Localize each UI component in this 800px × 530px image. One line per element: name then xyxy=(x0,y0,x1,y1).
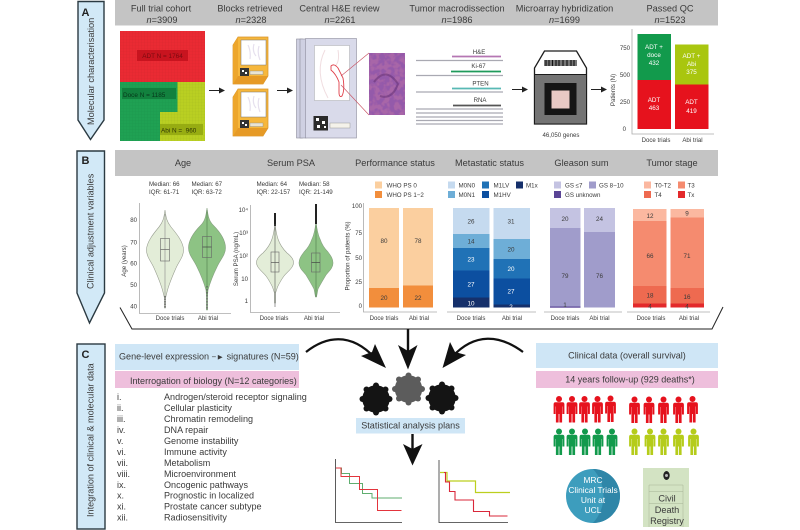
chart: performance status: Doce trials xyxy=(370,315,398,322)
chart: Gleason sum xyxy=(544,182,624,322)
chart: tumor stage xyxy=(627,182,710,322)
chart: PSA violins: 10⁴ xyxy=(239,207,248,214)
chart: tumor stage: 16 xyxy=(683,294,691,301)
header band B: Tumor stage xyxy=(646,158,698,168)
chart: metastatic status: 27 xyxy=(467,282,475,288)
arrow xyxy=(512,86,528,92)
arrow centre xyxy=(398,329,418,370)
chart: tumor stage: Doce trials xyxy=(637,315,665,322)
chart: PSA violins: Median: 64 xyxy=(256,181,288,188)
stacked bar: passed QC: Patients (N) xyxy=(610,74,617,106)
header band A: n=1699 xyxy=(549,15,580,25)
chart: metastatic status: M1x xyxy=(526,182,539,190)
section arrow B: Clinical adjustment variables xyxy=(86,173,96,289)
chart: metastatic status: 2 xyxy=(509,304,513,311)
section box C: Integration of clinical & molecular data xyxy=(86,362,96,517)
chart: tumor stage: 4 xyxy=(685,304,689,310)
chart: PSA violins: Serum PSA (ng/mL) xyxy=(233,232,240,286)
tumor macrodissection slides: Ki-67 xyxy=(471,63,486,70)
chart: performance status: 78 xyxy=(414,238,422,245)
stacked bar: passed QC: ADT xyxy=(685,99,698,106)
section box C xyxy=(77,344,105,529)
list: categories: Androgen/steroid receptor signaling xyxy=(164,392,307,402)
header band B: Performance status xyxy=(355,158,435,168)
chart: PSA violins: Abi trial xyxy=(304,315,324,322)
box: clinical data xyxy=(536,343,718,368)
chart: Gleason sum: 24 xyxy=(596,216,603,223)
section box C: C xyxy=(82,349,90,361)
list: categories: vi. xyxy=(117,447,126,457)
chart: age violins: Age (years) xyxy=(121,245,128,277)
icons: people xyxy=(554,396,699,455)
chart: age violins: Doce trials xyxy=(156,315,184,322)
chart: performance status: Abi trial xyxy=(409,315,429,322)
arrow xyxy=(591,86,607,92)
chart: PSA violins: 1 xyxy=(245,298,249,305)
bracket xyxy=(120,307,723,329)
header band A: Passed QC xyxy=(647,4,694,14)
stacked bar: passed QC: 0 xyxy=(623,126,627,133)
header band A: n=3909 xyxy=(147,15,177,25)
list: categories: xi. xyxy=(117,502,126,512)
chart: tumor stage: 18 xyxy=(646,292,654,300)
chart: tumor stage: 4 xyxy=(648,304,652,310)
box: gene-level expression xyxy=(115,344,299,370)
chart: performance status: 20 xyxy=(380,295,388,302)
chart: metastatic status xyxy=(447,182,539,322)
chart: performance status xyxy=(344,182,437,322)
stacked bar: passed QC xyxy=(610,29,714,144)
header band A: Central H&E review xyxy=(299,4,380,14)
arrow down xyxy=(403,434,422,466)
chart: age violins: 70 xyxy=(130,240,138,246)
icon: civil death registry: Death xyxy=(655,505,679,515)
chart: age violins: Median: 67 xyxy=(192,181,223,188)
stacked bar: passed QC: Doce trials xyxy=(642,137,670,144)
chart: tumor stage: Abi trial xyxy=(679,315,699,322)
stacked bar: passed QC: ADT xyxy=(648,97,660,104)
stacked bar: passed QC: 500 xyxy=(620,72,631,79)
box: statistical analysis plans xyxy=(356,418,465,434)
list: categories: ii. xyxy=(117,403,124,413)
chart: metastatic status: Doce trials xyxy=(457,315,485,322)
chart: age violins: Median: 66 xyxy=(149,181,180,188)
icon: MRC circle: Unit at xyxy=(581,495,606,505)
list: categories: iv. xyxy=(117,425,125,435)
header band B: Metastatic status xyxy=(455,158,524,168)
stacked bar: passed QC: 250 xyxy=(620,99,631,106)
list: categories: Radiosensitivity xyxy=(164,512,227,522)
section arrow A: A xyxy=(82,7,90,19)
list: categories: DNA repair xyxy=(164,425,208,435)
waffle: full trial cohort: ADT N = 1764 xyxy=(142,53,183,60)
chart: age violins: Abi trial xyxy=(198,315,218,322)
chart: age violins: IQR: 61-71 xyxy=(149,189,180,196)
panel A: molecular characterisation xyxy=(78,0,718,144)
chart: Gleason sum: GS unknown xyxy=(565,192,601,199)
section arrow A: Molecular characterisation xyxy=(86,18,96,125)
chart: metastatic status: 20 xyxy=(507,246,515,254)
chart: tumor stage: 66 xyxy=(646,253,654,260)
section arrow B xyxy=(77,151,104,323)
tumor macrodissection slides: PTEN xyxy=(472,80,489,88)
chart: tumor stage: T3 xyxy=(688,182,695,190)
chart: performance status: Proportion of patients (%) xyxy=(344,221,352,291)
chart: performance status: WHO PS 0 xyxy=(386,182,417,190)
chart: metastatic status: 26 xyxy=(467,218,475,226)
icon: civil death registry xyxy=(643,468,689,527)
chart: age violins: 50 xyxy=(130,282,138,289)
header band A: Tumor macrodissection xyxy=(409,4,505,14)
icon: MRC circle xyxy=(566,469,620,523)
chart: age violins: 80 xyxy=(130,217,138,224)
icon: tissue blocks xyxy=(233,37,268,136)
stacked bar: passed QC: 750 xyxy=(620,45,631,52)
chart: Gleason sum: 79 xyxy=(561,273,569,280)
stacked bar: passed QC: Abi xyxy=(687,61,696,68)
chart: metastatic status: M0N0 xyxy=(458,182,476,190)
icon: MRC circle: Clinical Trials xyxy=(568,485,618,495)
chart: metastatic status: Abi trial xyxy=(502,315,522,322)
chart: performance status: 75 xyxy=(355,230,363,237)
chart: Gleason sum: Abi trial xyxy=(589,315,610,322)
arrow xyxy=(209,88,225,94)
chart: age violins: 40 xyxy=(130,304,138,310)
header band A: n=2261 xyxy=(325,15,355,25)
list: categories: Metabolism xyxy=(164,458,210,468)
stacked bar: passed QC: ADT + xyxy=(645,44,663,51)
icon: MRC circle: UCL xyxy=(585,505,602,515)
stacked bar: passed QC: 463 xyxy=(649,105,660,112)
chart: tumor stage: T4 xyxy=(654,192,662,199)
chart: PSA violins: IQR: 21-149 xyxy=(299,189,333,196)
chart: PSA violins xyxy=(233,181,340,322)
panel B: clinical adjustment variables xyxy=(77,150,723,329)
chart: Gleason sum: Doce trials xyxy=(551,315,579,322)
chart: Gleason sum: 76 xyxy=(596,273,603,280)
icon: civil death registry: Civil xyxy=(658,494,676,504)
box: statistical analysis plans: Statistical analysis plans xyxy=(361,421,460,431)
icon: microarray chip xyxy=(534,51,586,124)
header band B: Age xyxy=(175,158,191,168)
list: categories: viii. xyxy=(117,469,130,479)
list: categories: Genome instability xyxy=(164,436,239,446)
header band B: Serum PSA xyxy=(267,158,316,168)
chart: performance status: 100 xyxy=(352,203,363,210)
chart: Gleason sum: 1 xyxy=(563,302,567,309)
panel C: integration xyxy=(77,329,718,529)
header band A: n=2328 xyxy=(236,15,266,25)
header band A: n=1523 xyxy=(655,15,685,25)
waffle: full trial cohort: Doce N = 1185 xyxy=(123,92,166,99)
chart: Gleason sum: GS ≤7 xyxy=(565,182,583,190)
list: categories: Prostate cancer subtype xyxy=(164,502,262,512)
list: categories: Cellular plasticity xyxy=(164,403,232,413)
stacked bar: passed QC: Abi trial xyxy=(682,137,703,144)
chart: performance status: 80 xyxy=(380,238,388,245)
chart: PSA violins: 10³ xyxy=(239,230,248,237)
chart: metastatic status: 23 xyxy=(467,256,475,264)
icon: civil death registry: Registry xyxy=(650,516,684,526)
chart: metastatic status: 27 xyxy=(507,288,515,296)
section arrow A xyxy=(78,2,104,140)
chart: tumor stage: 12 xyxy=(646,213,654,220)
chart: PSA violins: Median: 58 xyxy=(299,181,330,188)
curved arrow left xyxy=(306,339,386,368)
waffle: full trial cohort xyxy=(120,31,205,141)
label: genes: 46,050 genes xyxy=(543,132,579,139)
list: categories: Chromatin remodeling xyxy=(164,414,253,424)
curved arrow right xyxy=(442,339,523,368)
chart: PSA violins: 10 xyxy=(241,276,249,283)
stacked bar: passed QC: 432 xyxy=(649,60,660,67)
stacked bar: passed QC: doce xyxy=(647,52,661,59)
list: categories: xii. xyxy=(117,512,128,522)
chart: PSA violins: 10² xyxy=(239,253,248,260)
header band A xyxy=(115,0,718,26)
box: interrogation of biology xyxy=(115,371,299,388)
tumor macrodissection slides: H&E xyxy=(473,49,485,56)
chart: KM doce xyxy=(336,459,402,522)
chart: performance status: WHO PS 1−2 xyxy=(386,192,424,199)
stacked bar: passed QC: 419 xyxy=(686,108,697,115)
box: follow-up: 14 years follow-up (929 deaths*) xyxy=(565,374,695,384)
box: follow-up xyxy=(536,371,718,388)
list: categories: iii. xyxy=(117,414,126,424)
list: categories: ix. xyxy=(117,480,126,490)
chart: Gleason sum: 20 xyxy=(561,216,569,223)
section arrow B: B xyxy=(82,155,90,167)
chart: metastatic status: M0N1 xyxy=(458,192,476,199)
chart: age violins: 60 xyxy=(130,260,138,268)
arrow xyxy=(277,88,293,94)
chart: performance status: 0 xyxy=(359,303,363,310)
list: categories: v. xyxy=(117,436,123,446)
chart: performance status: 22 xyxy=(414,295,422,302)
header band A: Blocks retrieved xyxy=(217,4,283,14)
chart: tumor stage: Tx xyxy=(688,192,695,199)
list: categories: Immune activity xyxy=(164,447,227,457)
chart: metastatic status: 14 xyxy=(467,238,475,246)
chart: metastatic status: M1HV xyxy=(494,192,512,199)
list: categories: Microenvironment xyxy=(164,469,236,479)
chart: performance status: 25 xyxy=(355,279,363,286)
header band B: Gleason sum xyxy=(554,158,609,168)
stacked bar: passed QC: ADT + xyxy=(683,53,701,60)
chart: tumor stage: T0-T2 xyxy=(654,182,672,190)
header band A: n=1986 xyxy=(442,15,472,25)
chart: Gleason sum: GS 8−10 xyxy=(599,182,624,190)
chart: age violins: IQR: 63-72 xyxy=(192,189,222,196)
stacked bar: passed QC: 375 xyxy=(686,69,697,76)
box: clinical data: Clinical data (overall survival) xyxy=(568,350,686,360)
chart: metastatic status: 20 xyxy=(507,266,515,273)
tumor macrodissection slides: RNA xyxy=(474,97,487,104)
header band A: Full trial cohort xyxy=(131,4,192,14)
tumor macrodissection slides xyxy=(416,49,503,124)
chart: tumor stage: 9 xyxy=(685,210,689,218)
chart: metastatic status: M1LV xyxy=(494,182,510,190)
chart: metastatic status: 31 xyxy=(507,218,515,226)
chart: KM abi xyxy=(439,460,510,522)
list: categories: i. xyxy=(117,392,122,402)
chart: PSA violins: Doce trials xyxy=(260,315,288,322)
box: interrogation of biology: Interrogation of biology (N=12 categories) xyxy=(130,376,297,386)
list: categories: Prognostic in localized xyxy=(164,490,254,500)
chart: tumor stage: 71 xyxy=(683,253,691,260)
header band A: Microarray hybridization xyxy=(516,4,613,14)
chart: performance status: 50 xyxy=(355,255,363,262)
list: categories: Oncogenic pathways xyxy=(164,480,248,490)
icon: gears xyxy=(360,372,458,416)
chart: age violins xyxy=(121,181,231,322)
list: categories: vii. xyxy=(117,458,128,468)
chart: metastatic status: 10 xyxy=(467,300,475,308)
box: gene-level expression: Gene-level expression −► signatures (N=59) xyxy=(119,352,299,362)
list: categories: x. xyxy=(117,490,124,500)
header band B xyxy=(115,150,718,176)
icon: MRC circle: MRC xyxy=(583,475,603,485)
waffle: full trial cohort: Abi N = 960 xyxy=(161,128,197,134)
chart: PSA violins: IQR: 22-157 xyxy=(256,189,291,196)
icon: H&E slide with zoom xyxy=(296,38,405,138)
list: categories xyxy=(117,392,307,522)
